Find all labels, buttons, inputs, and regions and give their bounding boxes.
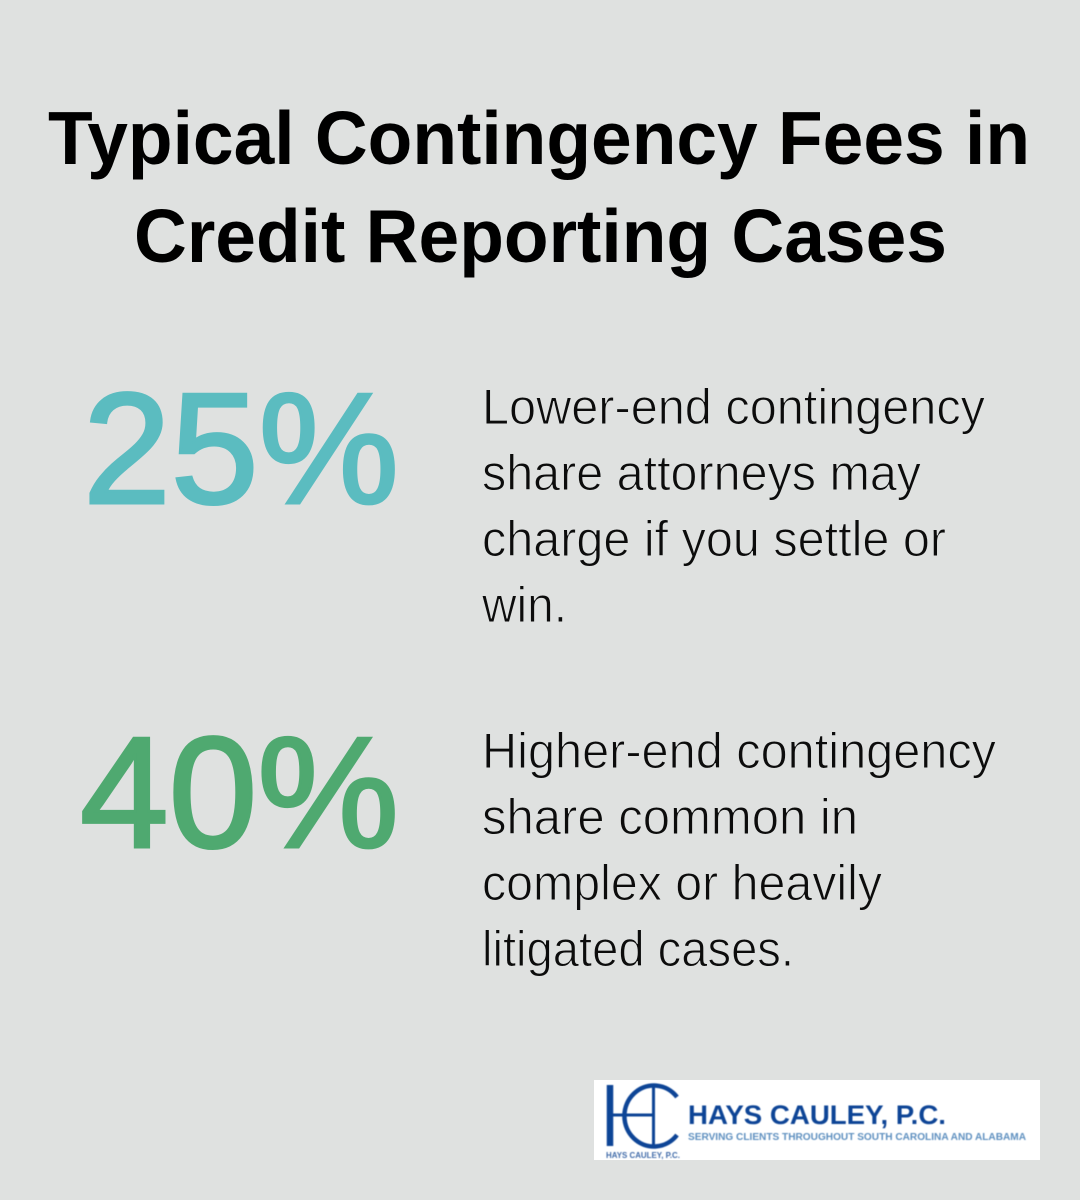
description: 40%: Higher-end contingency bbox=[482, 723, 996, 779]
description: 40%: litigated cases. bbox=[482, 921, 794, 977]
title: Typical Contingency Fees in bbox=[48, 96, 1030, 180]
description: 25%: win. bbox=[481, 577, 567, 633]
logo: Hays Cauley, P.C. bbox=[594, 1080, 1040, 1160]
small logo caption: HAYS CAULEY, P.C. bbox=[606, 1150, 680, 1160]
description: 25%: Lower-end contingency bbox=[482, 379, 985, 435]
stat: 25%: 25% bbox=[83, 361, 399, 537]
description: 40% bbox=[482, 723, 996, 977]
company name: HAYS CAULEY, P.C. bbox=[688, 1100, 946, 1130]
tagline: SERVING CLIENTS THROUGHOUT SOUTH CAROLINA AND ALABAMA bbox=[688, 1132, 1026, 1143]
description: 25%: share attorneys may bbox=[482, 445, 921, 501]
title: Credit Reporting Cases bbox=[134, 194, 947, 278]
description: 40%: share common in bbox=[482, 789, 858, 845]
title bbox=[48, 96, 1030, 278]
description: 40%: complex or heavily bbox=[482, 855, 882, 911]
description: 25% bbox=[481, 379, 985, 633]
stat: 40%: 40% bbox=[80, 705, 399, 881]
icon: HC monogram bbox=[610, 1085, 677, 1147]
description: 25%: charge if you settle or bbox=[482, 511, 946, 567]
